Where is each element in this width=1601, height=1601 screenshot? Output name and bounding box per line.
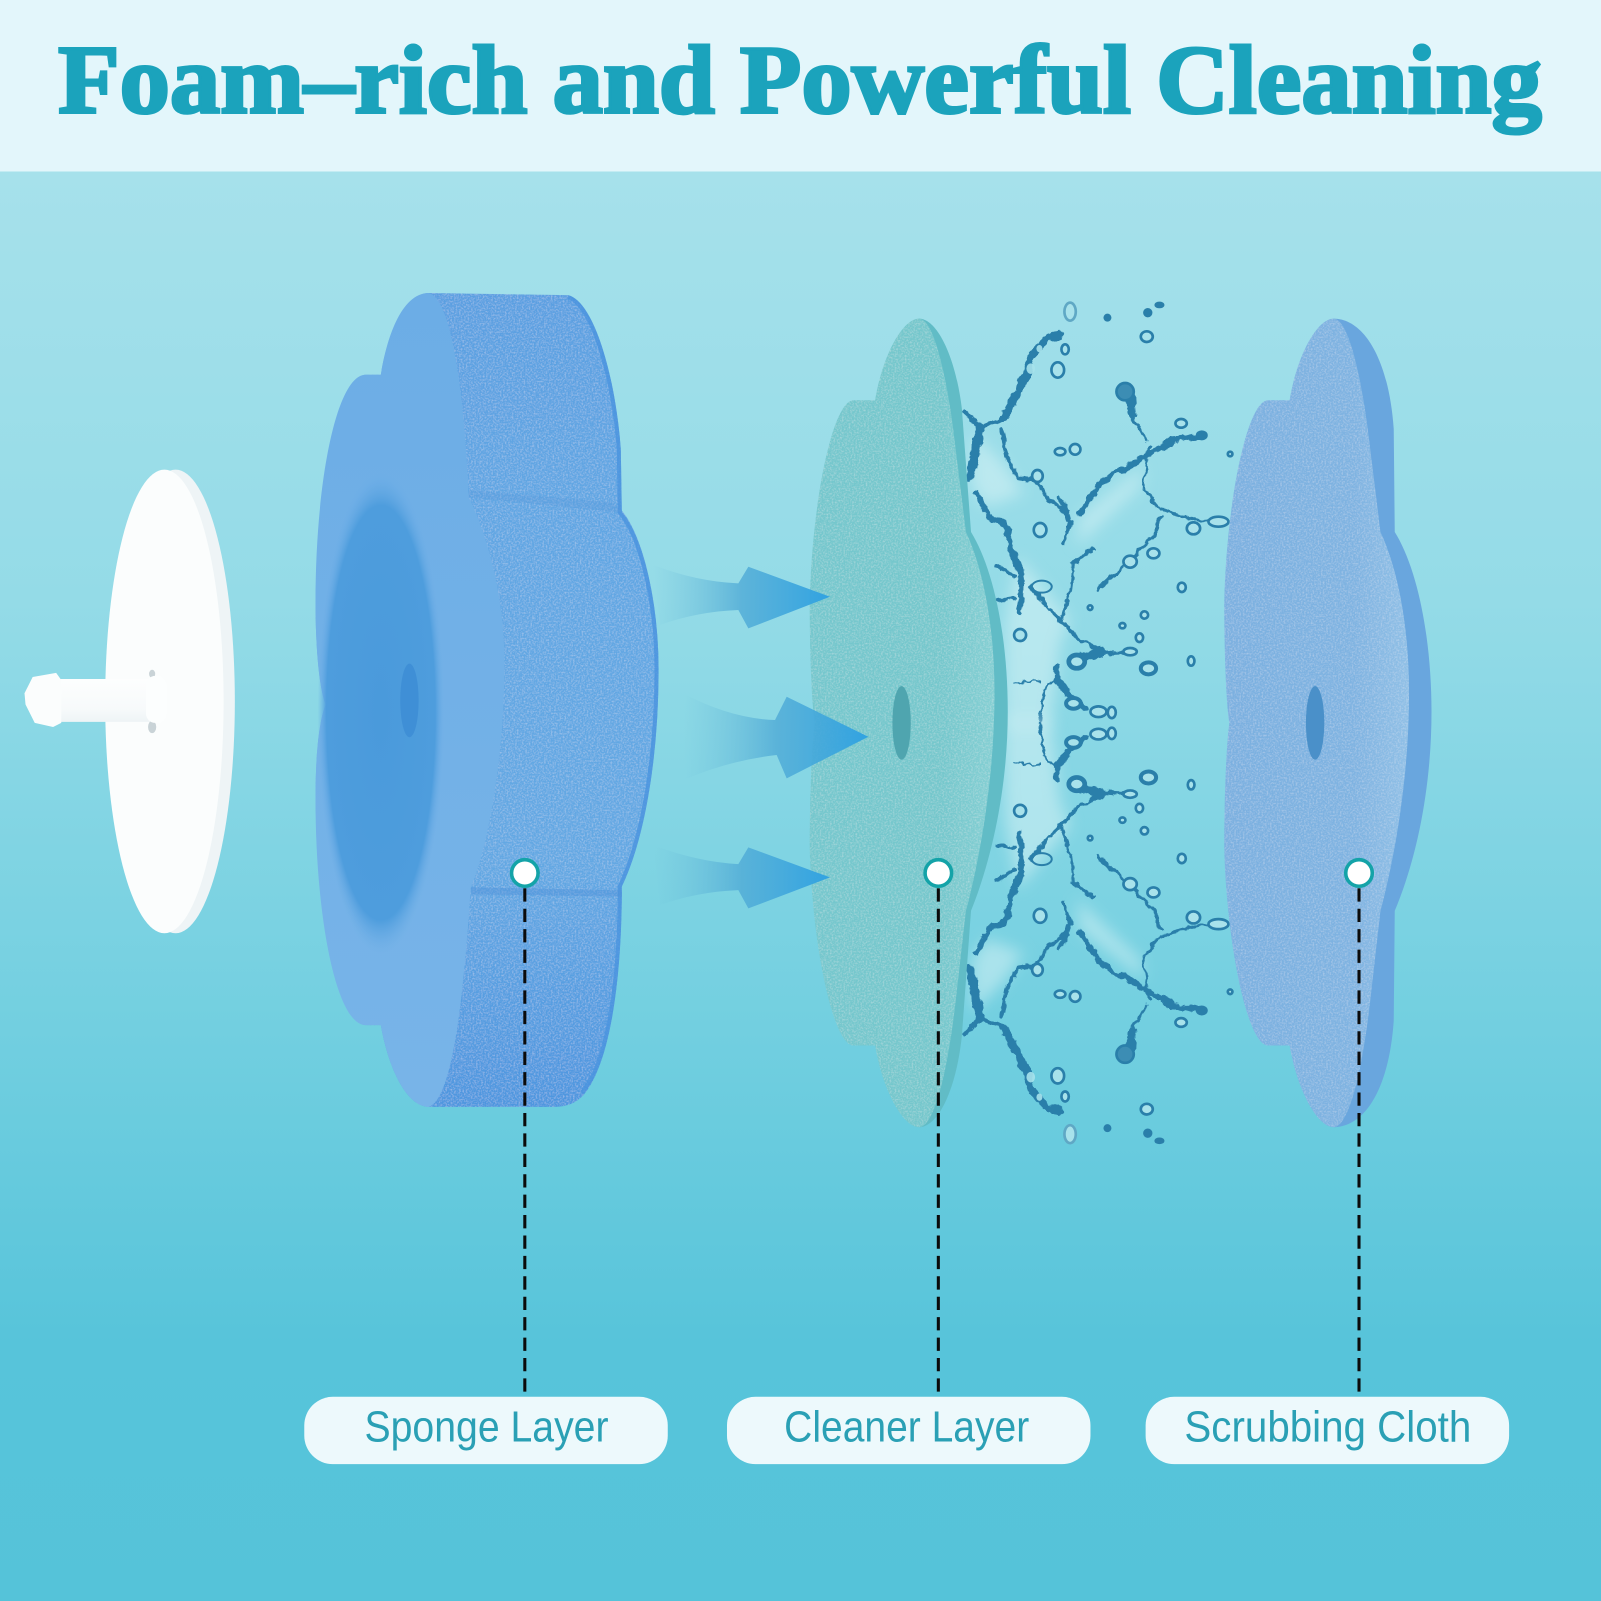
cleaner layer	[810, 319, 1008, 1127]
marker dot	[1346, 860, 1372, 886]
stem collar	[146, 670, 166, 733]
water splash	[965, 303, 1232, 1143]
dashed line	[523, 888, 526, 1397]
cleaner layer face	[810, 319, 994, 1127]
sponge layer	[316, 293, 659, 1107]
sponge front face	[316, 293, 504, 1107]
cap disc edge	[116, 470, 235, 933]
marker dot	[512, 860, 538, 886]
stem	[60, 679, 150, 722]
header band	[0, 0, 1601, 172]
collar slit bottom	[148, 721, 156, 733]
label: cleaner layer: Cleaner Layer	[784, 1403, 1029, 1452]
scrubbing cloth	[1224, 319, 1432, 1127]
scrubbing cloth hole	[1306, 686, 1324, 760]
label: cleaner layer	[727, 1397, 1090, 1464]
collar slit top	[149, 670, 155, 678]
arrow: bottom	[653, 845, 830, 908]
scrubbing cloth side	[1333, 319, 1432, 1127]
scrubbing cloth face	[1224, 319, 1409, 1127]
label: scrubbing cloth: Scrubbing Cloth	[1184, 1403, 1471, 1452]
leader: cleaner layer	[925, 860, 952, 1397]
cleaner layer hole	[892, 686, 911, 760]
sponge center hole	[400, 664, 419, 737]
leader: sponge layer	[512, 860, 538, 1397]
arrow: middle	[683, 693, 868, 780]
label: sponge layer	[304, 1397, 668, 1464]
sponge recessed well	[318, 472, 444, 954]
cap disc face	[105, 470, 224, 933]
label: sponge layer: Sponge Layer	[365, 1403, 609, 1452]
title: Foam–rich and Powerful Cleaning	[58, 26, 1542, 133]
arrow: top	[653, 565, 830, 628]
splash upper half	[965, 303, 1232, 739]
dashed line	[1358, 888, 1361, 1397]
sponge upper crease	[468, 490, 622, 513]
marker dot	[925, 860, 952, 886]
sponge side wall	[316, 293, 659, 1107]
label: scrubbing cloth	[1146, 1397, 1509, 1464]
sponge lower crease	[471, 887, 622, 896]
stem tip	[25, 673, 61, 727]
cleaner layer side	[919, 319, 1008, 1127]
white cap with stem	[25, 470, 235, 933]
sponge rim shading	[568, 297, 657, 1093]
splash lower half	[965, 707, 1232, 1143]
dashed line	[937, 888, 940, 1397]
leader: scrubbing cloth	[1346, 860, 1372, 1397]
collar body	[146, 676, 166, 723]
